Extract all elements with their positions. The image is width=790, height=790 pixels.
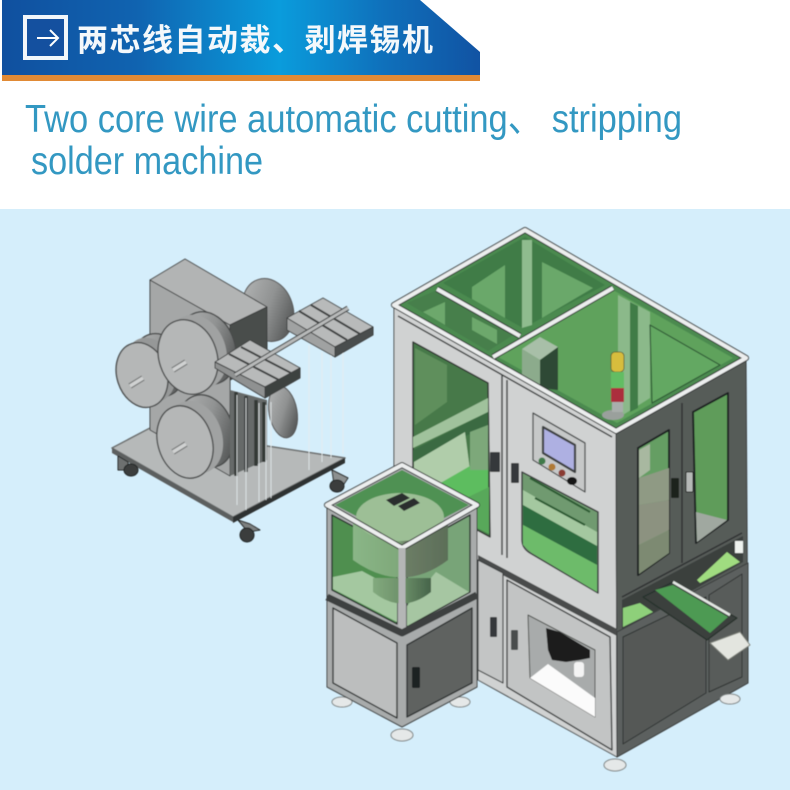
caster wheels [118, 456, 348, 542]
buttons [538, 458, 577, 485]
discharge conveyor [643, 582, 750, 660]
lower right cabinet [617, 563, 748, 757]
operator panel [533, 413, 585, 492]
feeder bowl [353, 493, 448, 604]
front spools [108, 304, 245, 486]
back compartment [443, 237, 605, 328]
heading: English title: Two core wire automatic cutting、 stripping [25, 98, 682, 141]
lower left panel [478, 560, 503, 683]
inner control box [522, 337, 558, 390]
header banner [2, 0, 480, 81]
icon: arrow box [25, 17, 66, 58]
machine feet [604, 694, 740, 771]
feeder lower doors [333, 608, 472, 718]
machine right face [616, 358, 748, 757]
touch screen [543, 427, 575, 472]
hanging wires [237, 345, 343, 510]
lower cabinet door [507, 580, 612, 750]
feeder parts track [386, 493, 420, 511]
centre viewing window [522, 472, 598, 593]
stand base plate [112, 428, 345, 523]
upper right doors [622, 393, 742, 597]
vibratory feeder unit [327, 465, 477, 741]
machine front-left face [394, 305, 617, 757]
top interior compartments [394, 230, 746, 431]
door handles [671, 472, 693, 498]
signal tower [602, 352, 624, 420]
main machine [394, 230, 750, 771]
cabinet opening with regulators [528, 615, 595, 717]
feeder feet [332, 697, 470, 741]
top frame rails [394, 230, 746, 431]
left compartment [407, 290, 518, 351]
central housing box [150, 259, 267, 476]
right compartment [498, 290, 733, 423]
heading: English title: solder machine [31, 140, 263, 183]
heading: English title [25, 98, 682, 183]
door window left [638, 430, 669, 575]
door window right [693, 393, 728, 543]
spool stand [108, 259, 373, 542]
dark vertical wire plates [230, 390, 267, 476]
heading: Chinese title: 两芯线自动裁、剥焊锡机 [77, 23, 433, 58]
left door window [413, 342, 490, 537]
open green band [622, 536, 743, 630]
feeder frame [327, 465, 477, 727]
panel: light blue background [0, 209, 790, 790]
feeder top frame [327, 465, 477, 633]
wire guide blocks and bar [215, 298, 373, 398]
feeder glass enclosure [332, 470, 470, 627]
mid rail [478, 555, 617, 636]
door seams and handles [398, 316, 612, 558]
back spools [234, 272, 302, 440]
